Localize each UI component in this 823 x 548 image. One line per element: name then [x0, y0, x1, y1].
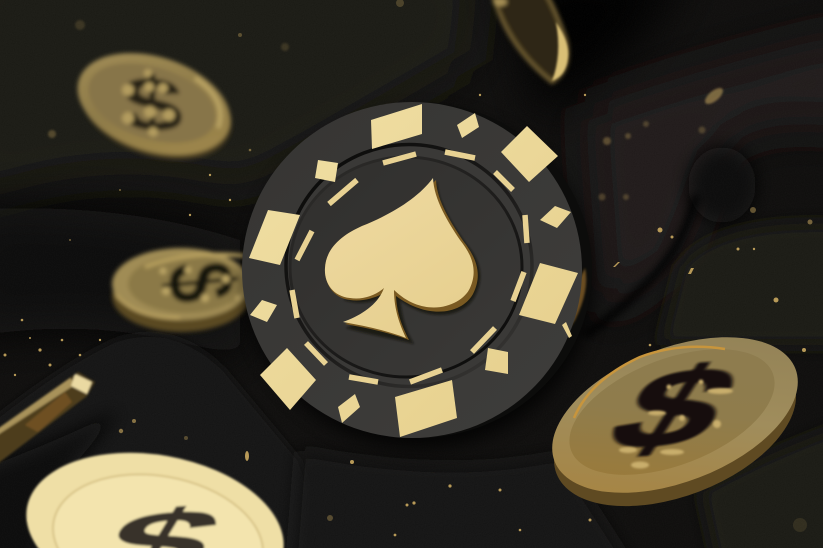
- spade shadow: [344, 182, 480, 344]
- dollar symbol: $: [121, 60, 183, 150]
- dollar symbol: $: [147, 257, 255, 307]
- spade: [325, 178, 474, 338]
- dollar symbol: $: [583, 342, 765, 474]
- coin: top left: [64, 35, 245, 178]
- spade bevel: [325, 180, 478, 340]
- chip centre disc: [290, 157, 522, 377]
- chip outer groove: [286, 144, 532, 386]
- poker chip: [242, 102, 594, 448]
- chip rim: [242, 102, 582, 438]
- coin: bottom left: [14, 434, 296, 548]
- coin: middle left: [112, 248, 255, 332]
- coin: top edge: [492, 0, 567, 82]
- coin: left edge bar: [0, 372, 95, 465]
- coin: top edge highlight: [552, 22, 568, 81]
- coin: lower right: [531, 306, 819, 537]
- chip rim squares: [249, 104, 578, 437]
- chip inner dashes: [292, 152, 527, 382]
